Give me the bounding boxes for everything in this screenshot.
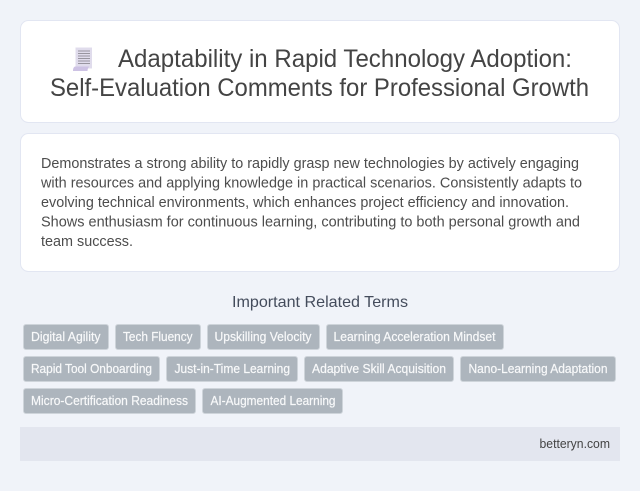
- comment text: Shows enthusiasm for continuous learning, contributing to both personal growth and: [41, 214, 580, 230]
- tag: Tech Fluency: [116, 324, 200, 350]
- panel: title card: [20, 20, 620, 122]
- tag: Rapid Tool Onboarding: [24, 356, 160, 382]
- tag: Digital Agility: Digital Agility: [31, 330, 101, 344]
- tag: AI-Augmented Learning: [202, 388, 342, 414]
- title: [50, 45, 589, 102]
- tag: Nano-Learning Adaptation: [460, 356, 616, 382]
- comment text: Demonstrates a strong ability to rapidly grasp new technologies by actively engaging: [41, 156, 579, 172]
- tag: AI-Augmented Learning: AI-Augmented Learning: [210, 394, 336, 408]
- tag: Upskilling Velocity: Upskilling Velocity: [214, 330, 312, 344]
- tag: Learning Acceleration Mindset: Learning Acceleration Mindset: [334, 330, 496, 344]
- comment text: team success.: [41, 234, 133, 250]
- panel: self-evaluation comment: [20, 134, 620, 272]
- footer bar: [20, 427, 620, 461]
- tag: Just-in-Time Learning: Just-in-Time Learning: [174, 362, 290, 376]
- tag: Micro-Certification Readiness: Micro-Certification Readiness: [31, 394, 188, 408]
- title: Self-Evaluation Comments for Professional Growth: [50, 74, 589, 102]
- tag: Digital Agility: [24, 324, 108, 350]
- tags: related terms: [24, 324, 616, 414]
- tag: Just-in-Time Learning: [166, 356, 298, 382]
- tag: Nano-Learning Adaptation: Nano-Learning Adaptation: [468, 362, 608, 376]
- tag: Tech Fluency: Tech Fluency: [123, 330, 193, 344]
- tag: Adaptive Skill Acquisition: [304, 356, 454, 382]
- comment text: with resources and applying knowledge in practical scenarios. Consistently adapts to: [40, 176, 582, 192]
- icon: paper scroll: [73, 48, 92, 71]
- heading: important related terms: Important Related Terms: [232, 294, 408, 311]
- tag: Adaptive Skill Acquisition: Adaptive Skill Acquisition: [312, 362, 446, 376]
- tag: Micro-Certification Readiness: [24, 388, 196, 414]
- footer source: betteryn.com: [540, 437, 610, 451]
- tag: Rapid Tool Onboarding: Rapid Tool Onboarding: [31, 362, 152, 376]
- comment text: evolving technical environments, which enhances project efficiency and innovation.: [41, 195, 569, 211]
- tag: Upskilling Velocity: [208, 324, 320, 350]
- title: Adaptability in Rapid Technology Adoption:: [118, 45, 572, 73]
- tag: Learning Acceleration Mindset: [326, 324, 504, 350]
- comment text: [40, 156, 582, 250]
